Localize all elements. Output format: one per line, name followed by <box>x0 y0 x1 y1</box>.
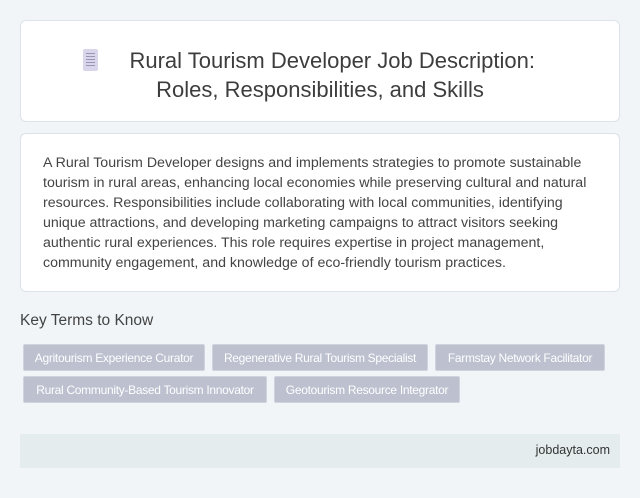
icon: document <box>83 49 98 71</box>
tag <box>23 376 267 403</box>
tag: Farmstay Network Facilitator <box>448 351 592 365</box>
tag: Agritourism Experience Curator <box>35 351 193 365</box>
footer text: jobdayta.com <box>536 443 610 457</box>
header card <box>20 20 620 122</box>
description text: authentic rural experiences. This role requires expertise in project management, <box>43 235 544 251</box>
description text: resources. Responsibilities include collaborating with local communities, identifying <box>43 195 563 211</box>
title: Rural Tourism Developer Job Description: <box>129 48 535 73</box>
key terms heading: Key Terms to Know <box>20 312 153 329</box>
description card <box>20 133 620 292</box>
tag <box>212 344 428 371</box>
description text: A Rural Tourism Developer designs and implements strategies to promote sustainable <box>43 155 581 171</box>
description text: tourism in rural areas, enhancing local economies while preserving cultural and natural <box>43 175 586 191</box>
description text: unique attractions, and developing marketing campaigns to attract visitors seeking <box>43 215 558 231</box>
tag <box>274 376 460 403</box>
description text <box>43 155 586 271</box>
tag: Geotourism Resource Integrator <box>286 383 448 397</box>
footer <box>20 434 620 468</box>
description text: community engagement, and knowledge of eco-friendly tourism practices. <box>43 255 506 271</box>
title <box>129 48 535 102</box>
title: Roles, Responsibilities, and Skills <box>156 77 484 102</box>
tag <box>435 344 605 371</box>
tag: Regenerative Rural Tourism Specialist <box>224 351 416 365</box>
tags <box>23 344 605 403</box>
tag: Rural Community-Based Tourism Innovator <box>36 383 254 397</box>
tag <box>23 344 205 371</box>
